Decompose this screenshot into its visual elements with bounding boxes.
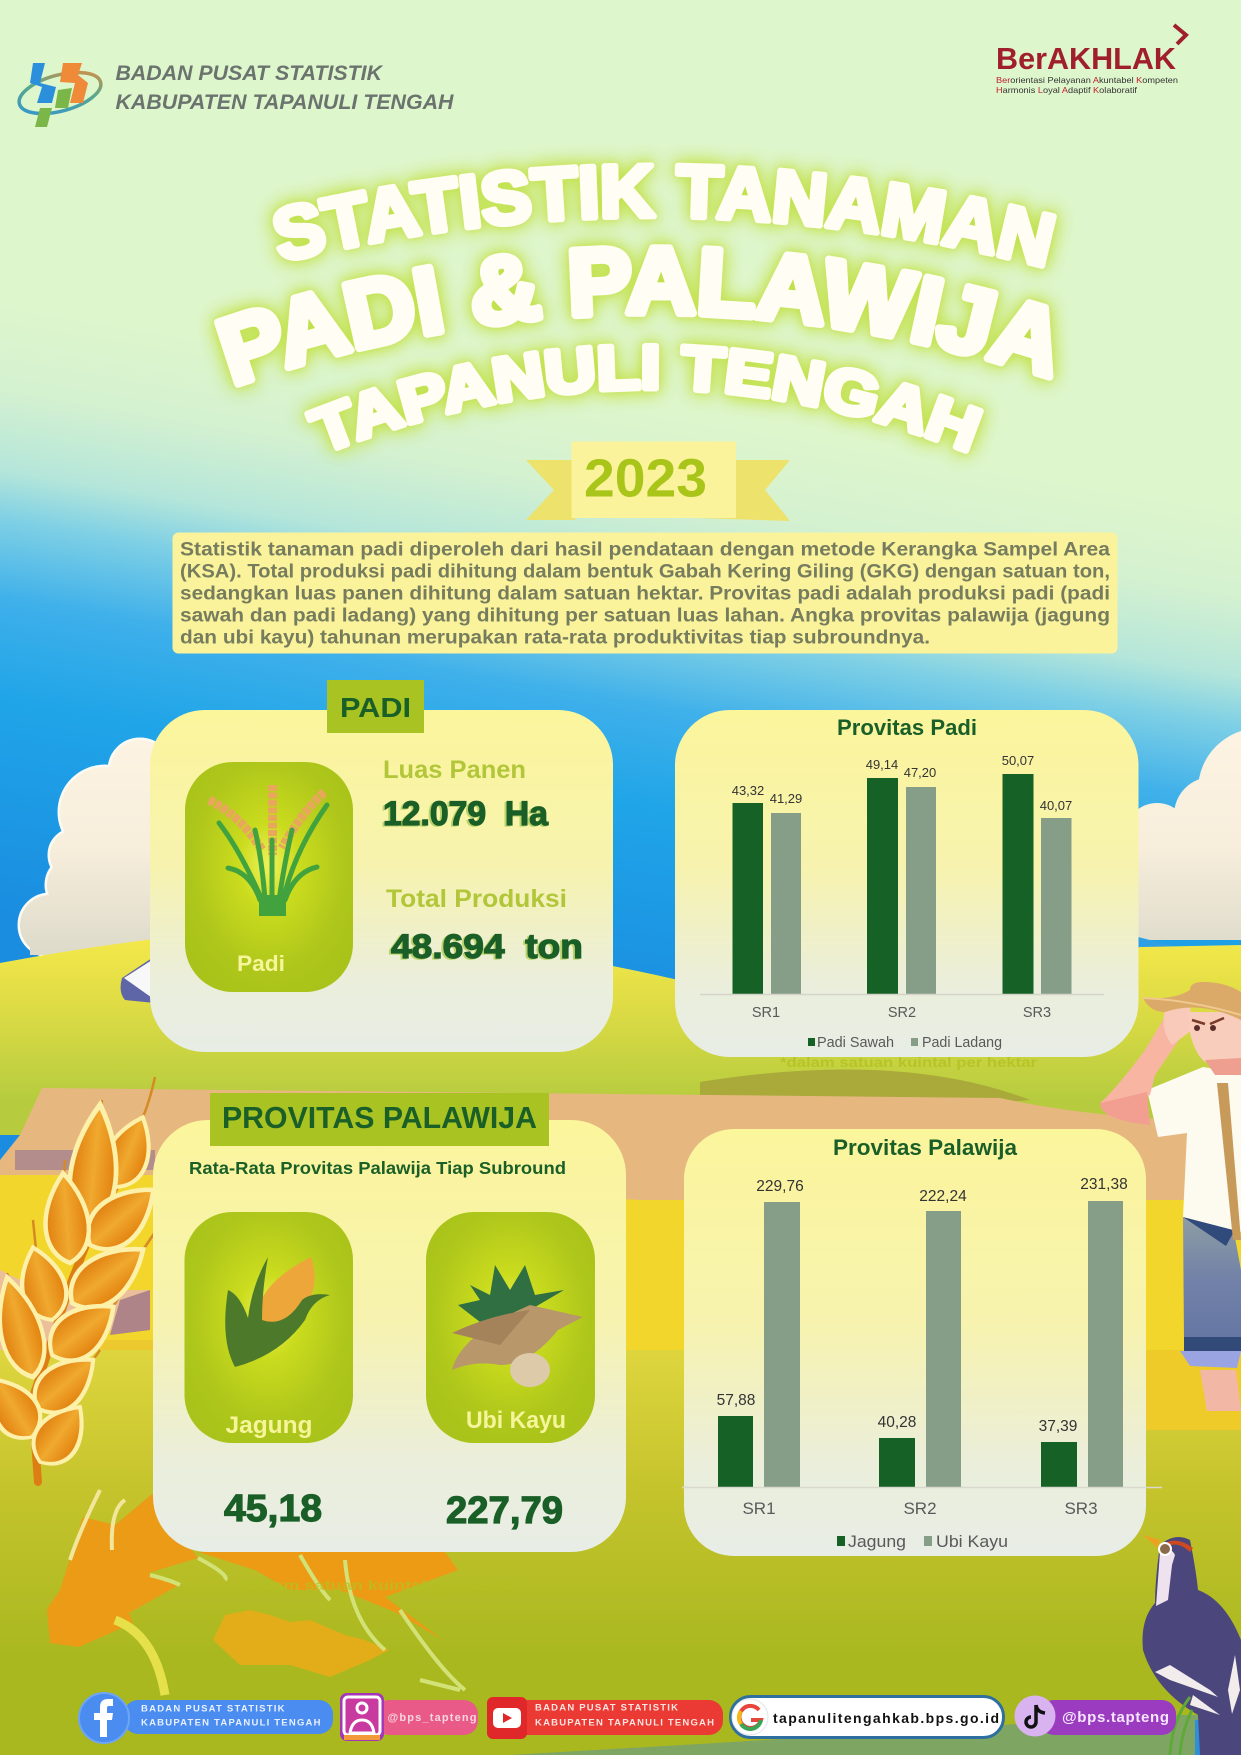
rock (121, 958, 155, 1003)
year ribbon: 2023 (584, 448, 707, 508)
instagram (340, 1693, 478, 1741)
logo: BerAKHLAK: BerAKHLAK (996, 41, 1177, 76)
heading: PADI: PADI (340, 692, 411, 723)
illustration: left wheat (0, 1077, 168, 1482)
header: agency name (116, 61, 454, 114)
panel: padi (150, 680, 613, 1052)
facebook: KABUPATEN TAPANULI TENGAH (141, 1718, 321, 1728)
text block: description (172, 532, 1118, 654)
stat: luas panen: Luas Panen (383, 756, 526, 784)
website: tapanulitengahkab.bps.go.id (773, 1710, 999, 1726)
chart title: Provitas Padi (837, 715, 977, 740)
header: agency name: BADAN PUSAT STATISTIK (116, 61, 383, 85)
header: agency name: KABUPATEN TAPANULI TENGAH (116, 90, 454, 114)
stat: luas panen: 12.079 Ha (383, 795, 549, 833)
illustration: farmer (1100, 982, 1241, 1411)
bar chart: provitas padi: 43,32 (732, 783, 764, 798)
website (730, 1696, 1004, 1738)
chart legend: Jagung (848, 1532, 906, 1551)
bar chart: provitas palawija (682, 1176, 1162, 1518)
bar chart: provitas palawija: 231,38 (1080, 1176, 1128, 1193)
heading: provitas palawija: PROVITAS PALAWIJA (222, 1100, 537, 1135)
chart legend: Padi Ladang (922, 1035, 1002, 1051)
bar chart: provitas palawija: 57,88 (717, 1392, 755, 1409)
icon card: jagung (184, 1212, 353, 1443)
stat: luas panen (383, 756, 549, 833)
subheading: Rata-Rata Provitas Palawija Tiap Subround (189, 1158, 566, 1178)
tiktok (1014, 1696, 1176, 1736)
bar chart: provitas palawija: 229,76 (756, 1178, 804, 1195)
icon card: padi: Padi (237, 951, 285, 976)
note: padi unit: *dalam satuan kuintal per hektar (780, 1054, 1038, 1070)
panel: provitas palawija (153, 1093, 626, 1552)
stat: total produksi: 48.694 ton (391, 928, 583, 966)
chart title: Provitas Palawija (833, 1135, 1018, 1160)
bar chart: provitas padi: 47,20 (904, 765, 936, 780)
icon card: ubi kayu (426, 1212, 595, 1443)
yellow field (0, 1175, 1241, 1360)
youtube: BADAN PUSAT STATISTIK (535, 1702, 678, 1714)
facebook: BADAN PUSAT STATISTIK (141, 1704, 285, 1714)
lower field (0, 1350, 1241, 1755)
icon card: padi (185, 762, 353, 992)
cloud: left (20, 740, 170, 965)
footer: social links (79, 1693, 1176, 1743)
icon card: ubi kayu: Ubi Kayu (466, 1407, 566, 1434)
text block: description: (KSA). Total produksi padi dihitung dalam bentuk Gabah Kering Giling (GKG) dengan satuan ton, (180, 562, 1110, 582)
year ribbon (526, 442, 790, 521)
illustration: bird (1142, 1535, 1241, 1755)
title (200, 147, 1070, 466)
title: TAPANULI TENGAH (292, 328, 997, 466)
hill (0, 925, 1241, 1140)
chart legend: Padi Sawah (817, 1035, 894, 1051)
heading: PADI (327, 680, 424, 733)
logo: BerAKHLAK: Harmonis Loyal Adaptif Kolaboratif (996, 85, 1138, 95)
stat: ubi kayu value: 227,79 (446, 1490, 563, 1532)
title: PADI & PALAWIJA (200, 229, 1068, 401)
note: palawija unit: *dalam satuan kuintal per hektar (240, 1577, 520, 1593)
illustration: lower wheat (47, 1490, 465, 1695)
tiktok: @bps.tapteng (1062, 1709, 1169, 1726)
stat: jagung value: 45,18 (224, 1488, 322, 1530)
panel: provitas palawija chart (682, 1129, 1162, 1556)
bar chart: provitas palawija: 222,24 (919, 1188, 967, 1205)
text block: description: Statistik tanaman padi diperoleh dari hasil pendataan dengan metode Kerangka Sampel Area (180, 540, 1110, 560)
bar chart: provitas padi: 49,14 (866, 757, 898, 772)
soil band (0, 1088, 1241, 1210)
bar chart: provitas padi: 50,07 (1002, 753, 1034, 768)
bar chart: provitas padi: 41,29 (770, 791, 802, 806)
youtube: KABUPATEN TAPANULI TENGAH (535, 1718, 714, 1728)
logo: BerAKHLAK (996, 25, 1186, 95)
icon card: jagung: Jagung (226, 1412, 312, 1439)
bar chart: provitas padi: SR1 (752, 1005, 780, 1021)
facebook (79, 1693, 333, 1743)
bar chart: provitas palawija: 40,28 (878, 1414, 916, 1431)
stat: total produksi: Total Produksi (386, 885, 567, 913)
text block: description: sawah dan padi ladang) yang dihitung per satuan luas lahan. Angka provitas palawija (jagung (180, 606, 1110, 626)
text block: description: sedangkan luas panen dihitung dalam satuan hektar. Provitas padi adalah produksi padi (padi (180, 584, 1110, 604)
bar chart: provitas palawija: SR3 (1064, 1499, 1098, 1518)
logo: BerAKHLAK: Berorientasi Pelayanan Akuntabel Kompeten (996, 75, 1178, 85)
text block: description: dan ubi kayu) tahunan merupakan rata-rata produktivitas tiap subroundnya. (180, 628, 930, 648)
bar chart: provitas padi: SR3 (1023, 1005, 1051, 1021)
instagram: @bps_tapteng (388, 1712, 476, 1724)
cloud: right (1125, 728, 1241, 940)
logo: BPS (15, 63, 105, 127)
stat: total produksi (386, 885, 583, 966)
chart legend (808, 1035, 1002, 1051)
youtube (487, 1697, 723, 1739)
bar chart: provitas padi: SR2 (888, 1005, 916, 1021)
bar chart: provitas palawija: SR1 (742, 1499, 776, 1518)
bar chart: provitas padi: 40,07 (1040, 798, 1072, 813)
bar chart: provitas palawija: 37,39 (1039, 1418, 1077, 1435)
chart legend (837, 1532, 1008, 1551)
chart legend: Ubi Kayu (936, 1532, 1008, 1551)
bar chart: provitas padi (700, 753, 1104, 1021)
panel: provitas padi chart (675, 710, 1138, 1057)
heading: provitas palawija (210, 1093, 549, 1146)
bar chart: provitas palawija: SR2 (903, 1499, 937, 1518)
title: STATISTIK TANAMAN (258, 147, 1070, 282)
